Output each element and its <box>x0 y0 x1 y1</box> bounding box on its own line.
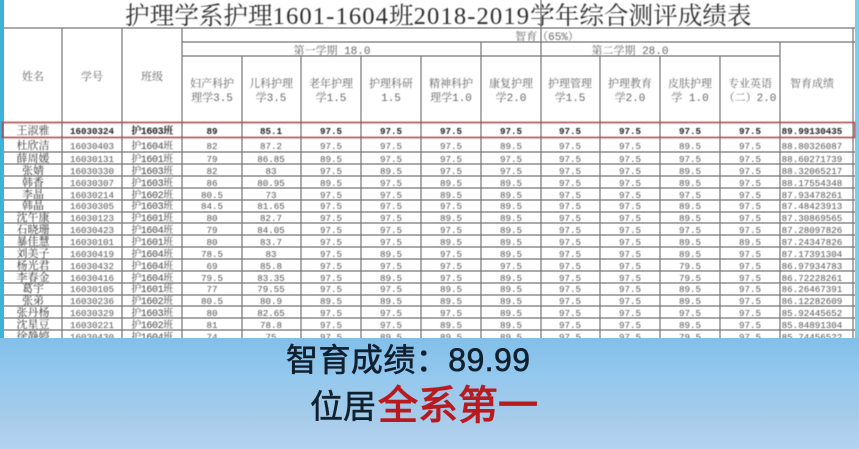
table data rows: 16030432 <box>70 261 114 272</box>
table data rows: 97.5 <box>320 166 342 177</box>
table data rows: 97.5 <box>320 201 342 212</box>
table data rows: 97.5 <box>380 225 402 236</box>
table data rows: 韩晶 <box>22 198 44 212</box>
table data rows: 97.5 <box>320 273 342 284</box>
table data rows: 97.5 <box>320 249 342 260</box>
highlighted row: top student: 97.5 <box>739 126 762 137</box>
table data rows: 97.5 <box>619 308 641 319</box>
table data rows: 护1601班 <box>131 211 173 225</box>
table data rows: 护1602班 <box>131 294 173 308</box>
table data rows: 97.5 <box>739 154 761 165</box>
table data rows: 89.5 <box>679 237 701 248</box>
table data rows: 97.5 <box>559 332 581 343</box>
table data rows: 97.5 <box>320 261 342 272</box>
table header <box>22 29 834 105</box>
table data rows: 韩香 <box>22 175 44 189</box>
table data rows: 87.30869565 <box>782 213 842 224</box>
table data rows: 89.5 <box>500 201 522 212</box>
table data rows: 97.5 <box>320 225 342 236</box>
table header: 理学1.0 <box>430 91 472 105</box>
table data rows: 97.5 <box>679 308 701 319</box>
highlighted row: top student: 97.5 <box>619 126 642 137</box>
table data rows: 69 <box>206 261 218 272</box>
table data rows: 89.5 <box>500 141 522 152</box>
table data rows: 79.5 <box>201 273 223 284</box>
table data rows: 16030305 <box>70 201 114 212</box>
table data rows: 护1604班 <box>131 330 173 344</box>
table data rows: 75 <box>265 332 277 343</box>
table data rows: 97.5 <box>619 225 641 236</box>
table data rows: 97.5 <box>440 308 462 319</box>
table data rows: 16030330 <box>70 166 114 177</box>
table data rows: 88.60271739 <box>782 154 842 165</box>
table data rows: 97.5 <box>739 201 761 212</box>
table data rows: 97.5 <box>559 308 581 319</box>
table data rows: 81.65 <box>257 201 285 212</box>
table data rows: 97.5 <box>380 154 402 165</box>
table data rows: 89.5 <box>440 332 462 343</box>
table data rows: 80 <box>206 213 218 224</box>
highlighted row: top student: 85.1 <box>260 126 283 137</box>
table data rows: 82.7 <box>260 213 282 224</box>
table data rows: 97.5 <box>739 308 761 319</box>
table data rows: 97.5 <box>619 320 641 331</box>
table data rows: 97.5 <box>559 201 581 212</box>
table data rows: 86.72228261 <box>782 273 843 284</box>
highlighted row: top student: 王淑雅 <box>16 123 50 137</box>
table header: 理学3.5 <box>191 91 233 105</box>
table data rows: 79.5 <box>679 273 701 284</box>
table data rows: 16030123 <box>70 213 114 224</box>
table data rows: 97.5 <box>380 308 402 319</box>
table data rows: 88.32065217 <box>782 166 842 177</box>
table data rows: 16030403 <box>70 141 114 152</box>
table data rows: 97.5 <box>739 141 761 152</box>
table data rows: 16030214 <box>70 190 115 201</box>
table data rows: 79 <box>206 154 218 165</box>
panel: score table <box>2 0 855 344</box>
table data rows: 97.5 <box>559 320 581 331</box>
table data rows: 97.5 <box>619 154 641 165</box>
table header: 学1.5 <box>316 91 346 105</box>
table header: 妇产科护 <box>190 76 234 91</box>
table data rows: 82 <box>206 166 218 177</box>
table data rows: 80.95 <box>257 178 285 189</box>
table data rows: 89.5 <box>320 296 342 307</box>
table data rows: 97.5 <box>500 166 522 177</box>
table header: 学号 <box>81 70 103 84</box>
table data rows: 97.5 <box>679 154 701 165</box>
table data rows: 张婧 <box>22 163 44 177</box>
table data rows: 89.5 <box>500 284 522 295</box>
table data rows: 83.35 <box>257 273 285 284</box>
table data rows: 16030131 <box>70 154 115 165</box>
table data rows: 89.5 <box>440 237 462 248</box>
highlighted row: top student: 97.5 <box>440 126 463 137</box>
table data rows: 89.5 <box>500 320 522 331</box>
table data rows: 杜欣洁 <box>16 138 50 152</box>
table data rows: 97.5 <box>559 296 581 307</box>
table header: （二）2.0 <box>724 91 776 105</box>
table data rows: 97.5 <box>739 249 761 260</box>
table data rows: 护1602班 <box>131 318 173 332</box>
table header: 1.5 <box>381 93 401 105</box>
table data rows: 97.5 <box>440 154 462 165</box>
table data rows: 护1603班 <box>131 164 173 178</box>
table data rows: 97.5 <box>739 178 761 189</box>
table data rows: 16030307 <box>70 178 114 189</box>
table data rows: 张弟 <box>22 293 44 307</box>
table data rows: 89.5 <box>440 190 462 201</box>
table data rows: 97.5 <box>380 237 402 248</box>
table data rows: 97.5 <box>619 261 641 272</box>
table data rows: 97.5 <box>440 249 462 260</box>
table data rows: 16030419 <box>70 249 114 260</box>
table data rows: 护1601班 <box>131 152 173 166</box>
table data rows: 88.17554348 <box>782 178 842 189</box>
table data rows: 刘美子 <box>16 246 50 260</box>
table data rows: 97.5 <box>739 332 761 343</box>
table data rows: 89.5 <box>440 213 462 224</box>
table data rows: 84.5 <box>201 201 223 212</box>
table data rows: 89.5 <box>380 273 402 284</box>
table data rows: 97.5 <box>559 166 581 177</box>
table data rows: 97.5 <box>619 141 641 152</box>
table data rows: 97.5 <box>559 141 581 152</box>
table data rows: 葛宇 <box>22 281 44 295</box>
highlighted row: top student: 97.5 <box>320 126 343 137</box>
table data rows: 97.5 <box>320 308 342 319</box>
table data rows: 护1604班 <box>131 223 173 237</box>
table data rows: 88.80326087 <box>782 141 842 152</box>
highlighted row: top student <box>2 122 854 138</box>
caption: score: 智育成绩：89.99 <box>286 342 530 378</box>
table data rows: 87.28097826 <box>782 225 842 236</box>
table data rows: 89.5 <box>500 273 522 284</box>
table data rows: 74 <box>206 332 218 343</box>
table data rows: 97.5 <box>619 284 641 295</box>
table data rows: 89.5 <box>679 166 701 177</box>
table data rows: 89.5 <box>500 296 522 307</box>
table data rows: 97.5 <box>619 296 641 307</box>
table header: 学3.5 <box>256 91 286 105</box>
table data rows: 97.5 <box>320 320 342 331</box>
table data rows: 97.5 <box>619 249 641 260</box>
highlighted row: top student: 89 <box>206 126 218 137</box>
table header: 皮肤护理 <box>668 76 712 91</box>
table data rows: 89.5 <box>679 249 701 260</box>
table data rows: 97.5 <box>739 190 761 201</box>
table data rows: 77 <box>206 284 218 295</box>
table data rows: 杨光君 <box>16 258 50 272</box>
table data rows: 89.5 <box>739 237 761 248</box>
table data rows: 97.5 <box>619 190 641 201</box>
table header: 姓名 <box>22 69 44 84</box>
table data rows: 78.8 <box>260 320 282 331</box>
table data rows: 80.5 <box>201 190 223 201</box>
table header: 康复护理 <box>489 76 533 91</box>
table data rows: 97.5 <box>440 141 462 152</box>
table data rows: 97.5 <box>440 261 462 272</box>
highlighted row: top student: 89.99130435 <box>782 126 843 137</box>
table data rows: 护1601班 <box>131 282 173 296</box>
table data rows: 89.5 <box>500 190 522 201</box>
table data rows: 97.5 <box>380 213 402 224</box>
table data rows: 97.5 <box>739 320 761 331</box>
table data rows: 83 <box>265 166 277 177</box>
highlighted row: top student: 97.5 <box>500 126 523 137</box>
table data rows: 85.8 <box>260 261 282 272</box>
table data rows: 89.5 <box>679 296 701 307</box>
table data rows: 97.5 <box>500 261 522 272</box>
table data rows: 97.5 <box>619 273 641 284</box>
table header: 学 1.0 <box>671 91 709 105</box>
panel: result caption <box>0 338 859 449</box>
table data rows: 97.5 <box>739 284 761 295</box>
table data rows: 97.5 <box>559 261 581 272</box>
table header: 护理科研 <box>369 76 413 91</box>
table data rows: 16030236 <box>70 296 114 307</box>
table data rows: 83 <box>265 249 277 260</box>
table data rows: 97.5 <box>320 237 342 248</box>
table data rows: 80 <box>206 237 218 248</box>
table data rows: 79.55 <box>257 284 285 295</box>
highlighted row: top student: 97.5 <box>559 126 582 137</box>
table data rows: 97.5 <box>380 261 402 272</box>
table data rows: 护1603班 <box>131 199 173 213</box>
table data rows: 张丹杨 <box>16 305 50 319</box>
table data rows: 李晶 <box>22 187 44 201</box>
table header: 儿科护理 <box>249 76 293 91</box>
table data rows: 89.5 <box>500 332 522 343</box>
table data rows: 80.9 <box>260 296 282 307</box>
table header: 老年护理 <box>309 76 353 91</box>
table header: 智育（65%） <box>515 29 579 44</box>
table data rows: 护1601班 <box>131 235 173 249</box>
table data rows: 97.5 <box>320 284 342 295</box>
table data rows: 97.5 <box>559 273 581 284</box>
table data rows: 16030221 <box>70 320 115 331</box>
table header: 学2.0 <box>496 91 526 105</box>
table data rows: 87.2 <box>260 141 282 152</box>
table data rows: 85.92445652 <box>782 308 842 319</box>
table data rows: 89.5 <box>679 213 701 224</box>
table data rows: 89.5 <box>500 249 522 260</box>
table data rows: 97.5 <box>320 190 342 201</box>
table data rows: 徐静婷 <box>16 329 50 343</box>
table data rows: 97.5 <box>320 332 342 343</box>
table data rows: 沈午康 <box>16 210 50 224</box>
table data rows: 86.85 <box>257 154 285 165</box>
table data rows: 89.5 <box>500 178 522 189</box>
table data rows: 97.5 <box>559 178 581 189</box>
table data rows: 84.05 <box>257 225 285 236</box>
table data rows: 79.5 <box>679 332 701 343</box>
table data rows: 89.5 <box>440 178 462 189</box>
table data rows: 沈星豆 <box>16 317 50 331</box>
table data rows: 护1604班 <box>131 271 173 285</box>
table data rows: 89.5 <box>440 320 462 331</box>
table data rows: 97.5 <box>380 284 402 295</box>
table data rows: 97.5 <box>380 320 402 331</box>
highlighted row: top student: 16030324 <box>70 126 115 137</box>
table data rows: 16030105 <box>70 284 114 295</box>
table data rows: 97.5 <box>619 166 641 177</box>
table data rows: 89.5 <box>320 178 342 189</box>
table data rows: 护1603班 <box>131 176 173 190</box>
table data rows: 97.5 <box>739 296 761 307</box>
table data rows: 97.5 <box>320 141 342 152</box>
table data rows: 97.5 <box>619 178 641 189</box>
table data rows: 89.5 <box>500 225 522 236</box>
table data rows: 80.5 <box>201 296 223 307</box>
table data rows: 79.5 <box>679 261 701 272</box>
table data rows: 89.5 <box>380 166 402 177</box>
table data rows: 87.24347826 <box>782 237 842 248</box>
table data rows: 97.5 <box>619 213 641 224</box>
table data rows: 护1603班 <box>131 306 173 320</box>
table data rows: 薛周媛 <box>16 151 50 165</box>
table data rows: 89.5 <box>679 201 701 212</box>
table data rows: 97.5 <box>440 201 462 212</box>
table data rows: 89.5 <box>320 154 342 165</box>
table data rows: 16030430 <box>70 332 114 343</box>
caption: ranking: 位居 <box>310 388 376 425</box>
table header: 学2.0 <box>615 91 645 105</box>
table data rows: 护1602班 <box>131 188 173 202</box>
highlighted row: top student: 97.5 <box>380 126 403 137</box>
table data rows: 82 <box>206 141 218 152</box>
highlighted row: top student: 97.5 <box>679 126 702 137</box>
table data rows: 97.5 <box>739 273 761 284</box>
table header: 智育成绩 <box>790 76 834 91</box>
table data rows: 89.5 <box>440 296 462 307</box>
table data rows: 86.97934783 <box>782 261 842 272</box>
table header: 护理管理 <box>548 76 592 91</box>
table data rows: 97.5 <box>320 213 342 224</box>
table data rows <box>16 138 843 344</box>
table data rows: 83.7 <box>260 237 282 248</box>
table data rows: 82.65 <box>257 308 285 319</box>
table data rows: 89.5 <box>679 178 701 189</box>
table data rows: 97.5 <box>619 332 641 343</box>
table data rows: 16030101 <box>70 237 115 248</box>
table data rows: 81 <box>206 320 218 331</box>
table data rows: 护1604班 <box>131 139 173 153</box>
table data rows: 97.5 <box>380 178 402 189</box>
table data rows: 89.5 <box>500 213 522 224</box>
table data rows: 87.17391304 <box>782 249 843 260</box>
table data rows: 97.5 <box>559 190 581 201</box>
table data rows: 85.74456522 <box>782 332 842 343</box>
table data rows: 97.5 <box>559 154 581 165</box>
table data rows: 79 <box>206 225 218 236</box>
table data rows: 97.5 <box>619 237 641 248</box>
table data rows: 89.5 <box>679 284 701 295</box>
table data rows: 97.5 <box>440 273 462 284</box>
table header: 第一学期 18.0 <box>293 43 371 58</box>
table data rows: 97.5 <box>739 225 761 236</box>
table data rows: 89.5 <box>500 237 522 248</box>
table data rows: 89.5 <box>380 296 402 307</box>
table data rows: 16030423 <box>70 225 114 236</box>
table data rows: 97.5 <box>440 166 462 177</box>
highlighted row: top student: 护1603班 <box>131 124 173 138</box>
table data rows: 97.5 <box>380 201 402 212</box>
title: 护理学系护理1601-1604班2018-2019学年综合测评成绩表 <box>125 2 751 30</box>
table data rows: 97.5 <box>500 154 522 165</box>
table data rows: 97.5 <box>619 201 641 212</box>
table data rows: 97.5 <box>739 261 761 272</box>
table data rows: 护1604班 <box>131 259 173 273</box>
table data rows: 97.5 <box>739 166 761 177</box>
table header: 护理教育 <box>608 76 652 91</box>
table data rows: 89.5 <box>500 308 522 319</box>
table data rows: 97.5 <box>559 213 581 224</box>
table data rows: 97.5 <box>380 190 402 201</box>
table data rows: 73 <box>265 190 277 201</box>
table header: 班级 <box>141 69 163 84</box>
table data rows: 石晓珊 <box>16 222 50 236</box>
table data rows: 87.48423913 <box>782 201 842 212</box>
table data rows: 78.5 <box>201 249 223 260</box>
table data rows: 85.84891304 <box>782 320 843 331</box>
table data rows: 97.5 <box>739 213 761 224</box>
table data rows: 89.5 <box>440 284 462 295</box>
table data rows: 97.5 <box>559 225 581 236</box>
table data rows: 李春金 <box>16 270 50 284</box>
table data rows: 97.5 <box>559 249 581 260</box>
table data rows: 89.5 <box>380 249 402 260</box>
table data rows: 97.5 <box>559 284 581 295</box>
table data rows: 89.5 <box>380 332 402 343</box>
table data rows: 86.12282609 <box>782 296 842 307</box>
table data rows: 护1604班 <box>131 247 173 261</box>
table data rows: 89.5 <box>679 141 701 152</box>
table data rows: 86 <box>206 178 218 189</box>
table data rows: 16030329 <box>70 308 114 319</box>
table header: 学1.5 <box>555 91 585 105</box>
table data rows: 97.5 <box>380 141 402 152</box>
table data rows: 86.26467391 <box>782 284 843 295</box>
table data rows: 97.5 <box>440 225 462 236</box>
table header: 专业英语 <box>728 76 772 91</box>
table data rows: 暴佳慧 <box>16 234 50 248</box>
table data rows: 97.5 <box>679 190 701 201</box>
table header: 精神科护 <box>429 76 473 91</box>
table data rows: 89.5 <box>679 320 701 331</box>
caption: ranking: 全系第一 <box>378 384 538 428</box>
table data rows: 16030416 <box>70 273 114 284</box>
table data rows: 87.93478261 <box>782 190 843 201</box>
table data rows: 80 <box>206 308 218 319</box>
table data rows: 97.5 <box>679 225 701 236</box>
table data rows: 97.5 <box>559 237 581 248</box>
table header: 第二学期 28.0 <box>591 43 669 58</box>
